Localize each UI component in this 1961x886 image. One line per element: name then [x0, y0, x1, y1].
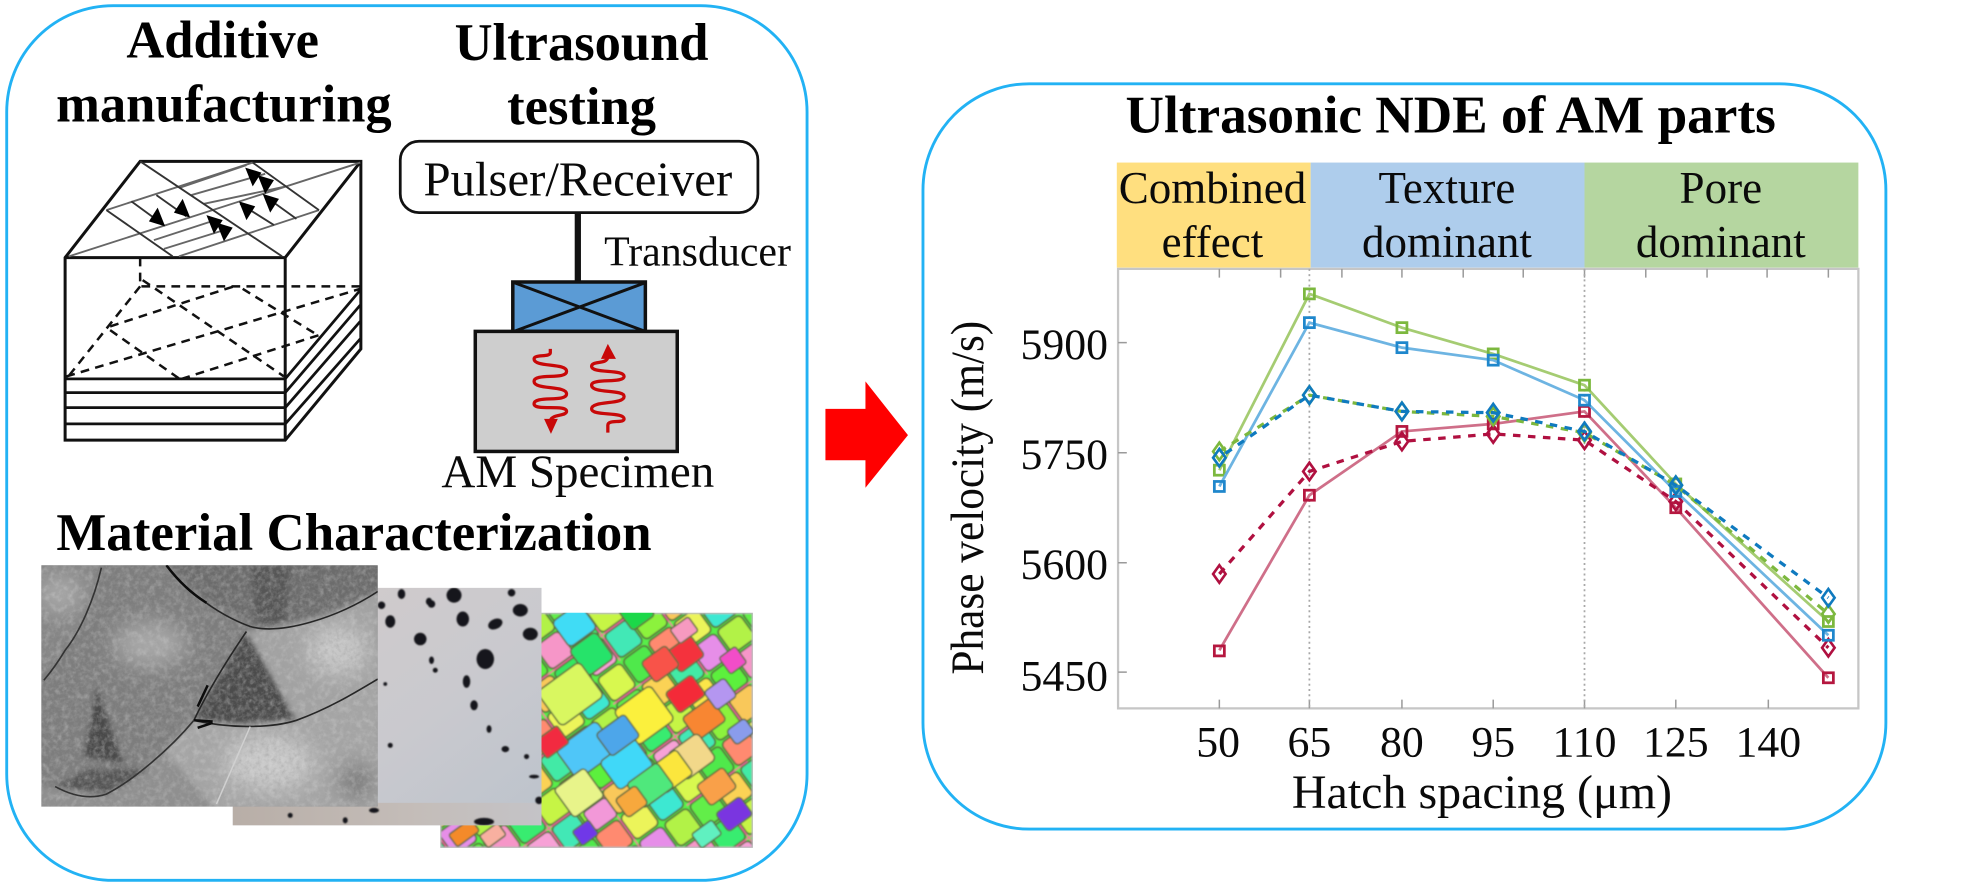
series: red dashed [1213, 425, 1835, 657]
y-axis tick labels: 5600 [1021, 541, 1108, 589]
y-axis tick labels: 5750 [1021, 431, 1108, 479]
arrow: left panel to right panel [825, 381, 908, 488]
box: pulser/receiver [400, 141, 758, 213]
band: pore dominant [1585, 163, 1858, 268]
heading: additive manufacturing [56, 12, 392, 133]
heading: ultrasound testing [455, 14, 709, 136]
series: blue solid [1214, 318, 1833, 640]
heading: ultrasound testing: testing [507, 78, 656, 136]
image: EBSD orientation map [440, 595, 755, 849]
heading: ultrasonic NDE: Ultrasonic NDE of AM parts [1126, 87, 1776, 145]
heading: ultrasound testing: Ultrasound [455, 14, 709, 72]
chart: phase velocity vs hatch spacing [943, 269, 1858, 819]
x-axis tick labels: 95 [1471, 719, 1515, 767]
heading: additive manufacturing: Additive [126, 12, 319, 70]
x-axis tick labels [1196, 719, 1801, 767]
band: combined effect: Combined [1119, 163, 1306, 213]
x-axis tick labels: 110 [1552, 719, 1617, 767]
x-axis tick labels: 140 [1736, 719, 1801, 767]
label: transducer: Transducer [604, 230, 791, 276]
band: combined effect: effect [1162, 217, 1264, 267]
band: pore dominant: dominant [1636, 217, 1806, 267]
heading: material characterization: Material Characterization [56, 504, 652, 562]
series: red solid [1214, 406, 1833, 683]
panel: additive manufacturing and testing [7, 6, 807, 880]
x-axis tick labels: 125 [1643, 719, 1709, 767]
cable [575, 213, 580, 281]
image: grain structure micrograph [38, 563, 380, 810]
x-axis title: Hatch spacing (μm) [1292, 767, 1672, 819]
y-axis title: Phase velocity (m/s) [943, 321, 994, 675]
y-axis tick labels: 5900 [1021, 321, 1108, 369]
panel: ultrasonic NDE of AM parts [923, 84, 1886, 829]
image: porosity micrograph [233, 588, 543, 825]
band: texture dominant [1311, 163, 1585, 268]
series: blue dashed [1213, 386, 1835, 607]
band: combined effect [1117, 163, 1311, 268]
band: texture dominant: Texture [1379, 163, 1515, 213]
x-axis tick labels: 65 [1288, 719, 1331, 767]
band: texture dominant: dominant [1362, 217, 1532, 267]
box: pulser/receiver: Pulser/Receiver [423, 153, 732, 207]
band: pore dominant: Pore [1680, 163, 1762, 213]
box: specimen with ultrasonic waves [475, 331, 677, 451]
diagram: layered cube with scan pattern [65, 161, 361, 440]
label: AM specimen: AM Specimen [441, 446, 714, 498]
y-axis tick labels: 5450 [1021, 652, 1108, 700]
x-axis tick labels: 80 [1380, 719, 1424, 767]
series: green dashed [1213, 386, 1835, 623]
series: green solid [1214, 289, 1833, 627]
y-axis tick labels [1021, 321, 1108, 700]
icon: transducer block [513, 282, 645, 331]
heading: additive manufacturing: manufacturing [56, 75, 392, 133]
x-axis tick labels: 50 [1196, 719, 1240, 767]
